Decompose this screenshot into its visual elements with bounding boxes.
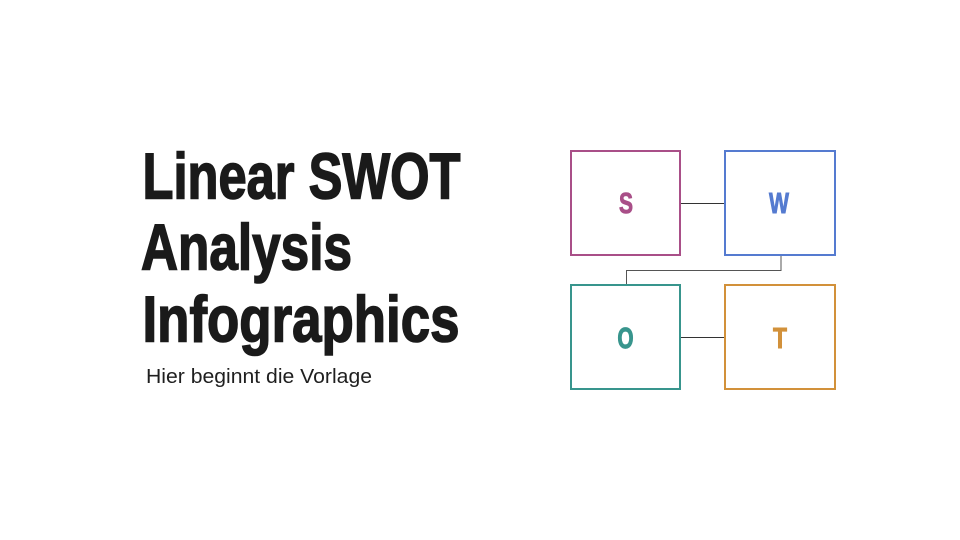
connector: S to W [681, 202, 725, 204]
box: O: O [618, 323, 634, 355]
box: O [571, 285, 680, 389]
subtitle: Hier beginnt die Vorlage [146, 366, 372, 388]
title: Analysis [141, 210, 352, 284]
connector: O to T [681, 336, 725, 338]
title: Infographics [142, 282, 460, 356]
box: T: T [773, 323, 787, 355]
title: Linear SWOT [142, 140, 460, 212]
box: W: W [769, 188, 789, 220]
connector: W to O [626, 256, 781, 285]
box: W [725, 151, 835, 255]
box: S [571, 151, 680, 255]
title [141, 140, 460, 356]
box: T [725, 285, 835, 389]
box: S: S [619, 188, 633, 220]
